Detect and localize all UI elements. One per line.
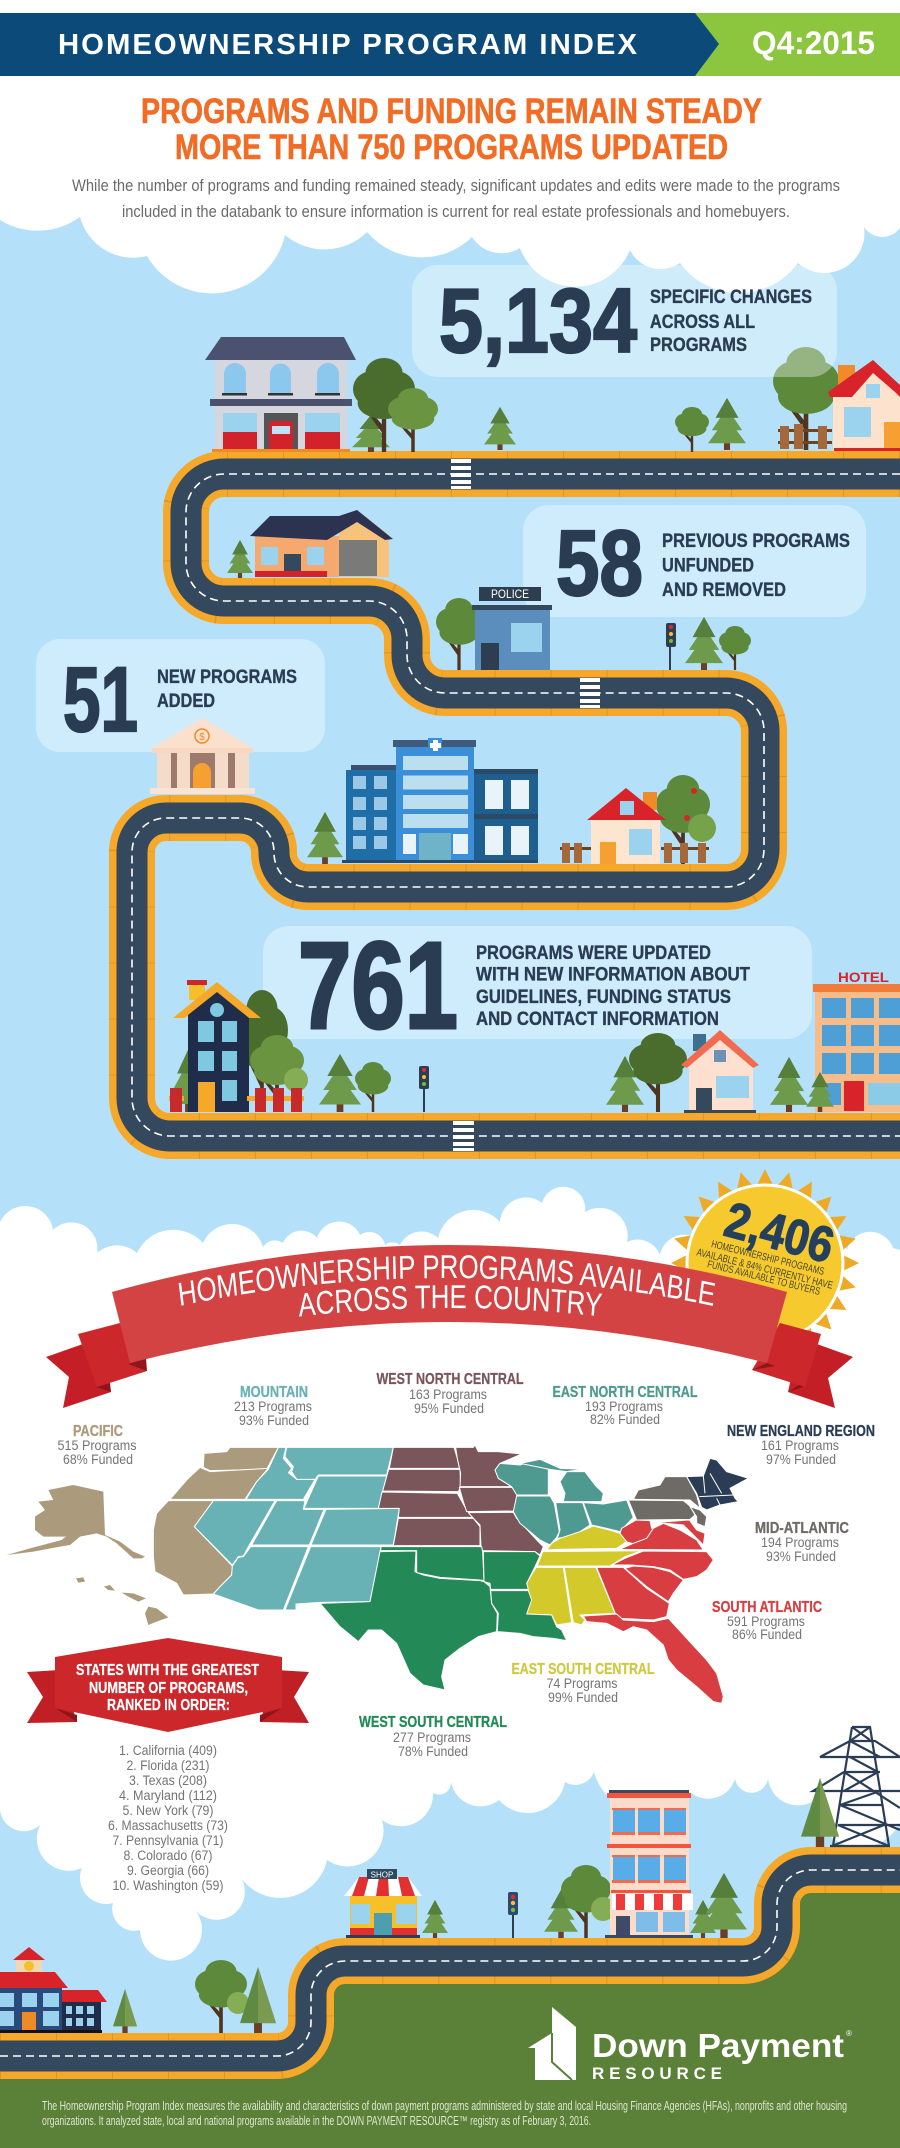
panel: 761 programs updated: WITH NEW INFORMATION ABOUT	[476, 964, 750, 986]
panel: 5,134 specific changes: SPECIFIC CHANGES	[650, 287, 812, 308]
east south central states	[526, 1526, 642, 1625]
ranked state list: 4. Maryland (112)	[119, 1788, 217, 1803]
region label: west north central	[376, 1371, 524, 1416]
trees and traffic light near tall house	[319, 1033, 687, 1112]
banner ribbon: ACROSS THE COUNTRY	[299, 1285, 602, 1316]
panel: 58 programs removed: UNFUNDED	[662, 556, 754, 576]
header band: HOMEOWNERSHIP PROGRAM INDEX	[58, 29, 639, 61]
region label: east north central: 193 Programs	[585, 1399, 663, 1414]
region label: pacific: 515 Programs	[58, 1438, 137, 1453]
header band: Q4:2015	[752, 25, 875, 61]
icon: traffic light and trees	[666, 617, 751, 670]
badge: 2,406 programs: AVAILABLE & 84% CURRENTLY HAVE	[695, 1246, 834, 1292]
icon: tall blue house	[169, 980, 308, 1112]
panel: 5,134 specific changes	[412, 265, 837, 377]
icon: fire station	[205, 337, 356, 452]
ribbon: states with greatest number	[27, 1638, 309, 1732]
trees and traffic light bottom	[422, 1865, 615, 1938]
panel: 761 programs updated: 761	[298, 918, 458, 1055]
region label: pacific: PACIFIC	[73, 1423, 123, 1440]
logo: Down Payment Resource	[528, 2007, 852, 2083]
west south central states	[320, 1547, 567, 1690]
region label: new england: 161 Programs	[761, 1438, 839, 1453]
pacific states and alaska hawaii	[7, 1447, 278, 1625]
panel: 58 programs removed: AND REMOVED	[662, 580, 786, 601]
ranked state list: 6. Massachusetts (73)	[108, 1818, 228, 1833]
icon: garage house	[227, 510, 393, 578]
region label: east south central: EAST SOUTH CENTRAL	[512, 1661, 655, 1678]
US map	[7, 1445, 748, 1703]
east north central states	[495, 1458, 633, 1545]
big pine by tower	[801, 1778, 839, 1847]
ranked state list: 10. Washington (59)	[112, 1878, 224, 1893]
region label: west north central: WEST NORTH CENTRAL	[376, 1371, 524, 1388]
panel: 5,134 specific changes: PROGRAMS	[650, 335, 747, 356]
region label: pacific: 68% Funded	[63, 1452, 133, 1467]
region label: south atlantic	[712, 1599, 822, 1642]
title: PROGRAMS AND FUNDING REMAIN STEADY	[141, 92, 762, 131]
panel: 58 programs removed: PREVIOUS PROGRAMS	[662, 531, 850, 552]
road: winding main road	[132, 474, 900, 1136]
icon: school	[0, 1947, 107, 2033]
banner ribbon: HOMEOWNERSHIP PROGRAMS AVAILABLE	[178, 1255, 716, 1306]
green ground	[0, 1870, 900, 2148]
icon: bank	[150, 718, 255, 794]
region label: mid-atlantic: MID-ATLANTIC	[755, 1520, 849, 1537]
region label: mountain	[234, 1384, 312, 1428]
badge: 2,406 programs: HOMEOWNERSHIP PROGRAMS	[710, 1238, 825, 1278]
region label: mid-atlantic	[755, 1520, 849, 1564]
icon: hospital	[307, 738, 538, 864]
region label: east north central	[552, 1384, 698, 1427]
logo: Down Payment Resource: RESOURCE	[592, 2064, 722, 2083]
crosswalks	[451, 459, 600, 1151]
region label: west south central: WEST SOUTH CENTRAL	[359, 1714, 507, 1731]
region label: mountain: 213 Programs	[234, 1399, 312, 1414]
panel: 761 programs updated	[263, 918, 812, 1055]
ribbon: states with greatest number: RANKED IN ORDER:	[107, 1697, 230, 1714]
region label: south atlantic: SOUTH ATLANTIC	[712, 1599, 822, 1616]
ranked state list	[108, 1743, 228, 1893]
region label: west south central: 78% Funded	[398, 1744, 468, 1759]
ribbon: states with greatest number: NUMBER OF PROGRAMS,	[89, 1680, 248, 1697]
logo: Down Payment Resource: Down Payment	[592, 2027, 844, 2064]
region label: east north central: 82% Funded	[590, 1412, 660, 1427]
trees near school	[113, 1960, 276, 2033]
new england states	[687, 1458, 748, 1510]
region label: south atlantic: 591 Programs	[727, 1614, 805, 1629]
panel: 58 programs removed	[523, 505, 866, 617]
region label: new england: 97% Funded	[766, 1452, 836, 1467]
icon: police station: POLICE	[491, 587, 529, 601]
panel: 58 programs removed: 58	[556, 511, 643, 615]
middle cloud	[0, 1187, 900, 1961]
ribbon: states with greatest number: STATES WITH THE GREATEST	[76, 1662, 259, 1679]
panel: 51 new programs: ADDED	[157, 691, 215, 712]
header band	[0, 13, 900, 76]
banner ribbon	[46, 1245, 853, 1408]
region label: west north central: 163 Programs	[409, 1387, 487, 1402]
panel: 761 programs updated: PROGRAMS WERE UPDATED	[476, 943, 711, 964]
region label: mid-atlantic: 93% Funded	[766, 1549, 836, 1564]
icon: police station	[436, 587, 552, 670]
region label: east south central: 74 Programs	[546, 1676, 618, 1691]
badge: 2,406 programs: 2,406	[719, 1191, 840, 1274]
icon: bank: $	[199, 732, 205, 743]
title: MORE THAN 750 PROGRAMS UPDATED	[175, 128, 728, 167]
region label: west south central	[359, 1714, 507, 1759]
title	[141, 92, 762, 167]
south atlantic states	[583, 1520, 723, 1703]
panel: 5,134 specific changes: ACROSS ALL	[650, 312, 755, 333]
region label: east north central: EAST NORTH CENTRAL	[552, 1384, 698, 1401]
mid-atlantic states	[628, 1477, 707, 1527]
icon: tall shop building	[605, 1790, 693, 1938]
panel: 51 new programs: 51	[63, 649, 138, 751]
panel: 5,134 specific changes: 5,134	[439, 271, 637, 372]
region label: mid-atlantic: 194 Programs	[761, 1535, 839, 1550]
icon: red house with apple tree	[560, 775, 716, 864]
ranked state list: 2. Florida (231)	[126, 1758, 210, 1773]
region label: new england	[727, 1423, 875, 1467]
trees by fire station	[352, 358, 516, 452]
region label: west north central: 95% Funded	[414, 1401, 484, 1416]
badge: 2,406 programs	[671, 1169, 859, 1357]
trees by tall building	[690, 1873, 747, 1938]
mountain states	[194, 1447, 399, 1610]
icon: coral house	[681, 1030, 759, 1113]
logo: Down Payment Resource: ®	[846, 2029, 852, 2038]
footnote	[42, 2099, 847, 2128]
panel: 761 programs updated: AND CONTACT INFORMATION	[476, 1009, 719, 1030]
trees and red house top right	[675, 347, 900, 452]
region label: south atlantic: 86% Funded	[732, 1627, 802, 1642]
region label: east south central	[512, 1661, 655, 1705]
icon: shop	[344, 1869, 422, 1938]
intro paragraph	[72, 176, 840, 221]
icon: shop: SHOP	[371, 1870, 393, 1880]
badge: 2,406 programs: FUNDS AVAILABLE TO BUYERS	[706, 1258, 821, 1298]
ranked state list: 9. Georgia (66)	[127, 1863, 209, 1878]
region label: pacific	[58, 1423, 137, 1467]
top cloud	[0, 0, 900, 293]
panel: 51 new programs	[36, 639, 325, 752]
ranked state list: 1. California (409)	[119, 1743, 217, 1758]
region label: mountain: 93% Funded	[239, 1413, 309, 1428]
icon: hotel	[770, 969, 900, 1112]
ranked state list: 8. Colorado (67)	[124, 1848, 212, 1863]
icon: power tower	[813, 1727, 900, 1846]
ranked state list: 3. Texas (208)	[129, 1773, 207, 1788]
panel: 761 programs updated: GUIDELINES, FUNDING STATUS	[476, 987, 731, 1008]
road: bottom road	[0, 1870, 900, 2056]
region label: west south central: 277 Programs	[393, 1730, 471, 1745]
region label: mountain: MOUNTAIN	[240, 1384, 308, 1401]
west north central states	[378, 1445, 543, 1555]
footnote: organizations. It analyzed state, local and national programs available in the DOWN PAYMENT RESOURCE™ registry as of February 3, 2016.	[42, 2114, 591, 2128]
region label: east south central: 99% Funded	[548, 1690, 618, 1705]
icon: hotel: HOTEL	[838, 969, 889, 985]
ranked state list: 5. New York (79)	[122, 1803, 214, 1818]
panel: 51 new programs: NEW PROGRAMS	[157, 667, 297, 688]
ranked state list: 7. Pennsylvania (71)	[112, 1833, 224, 1848]
intro paragraph: included in the databank to ensure information is current for real estate professionals and homebuyers.	[122, 202, 790, 221]
